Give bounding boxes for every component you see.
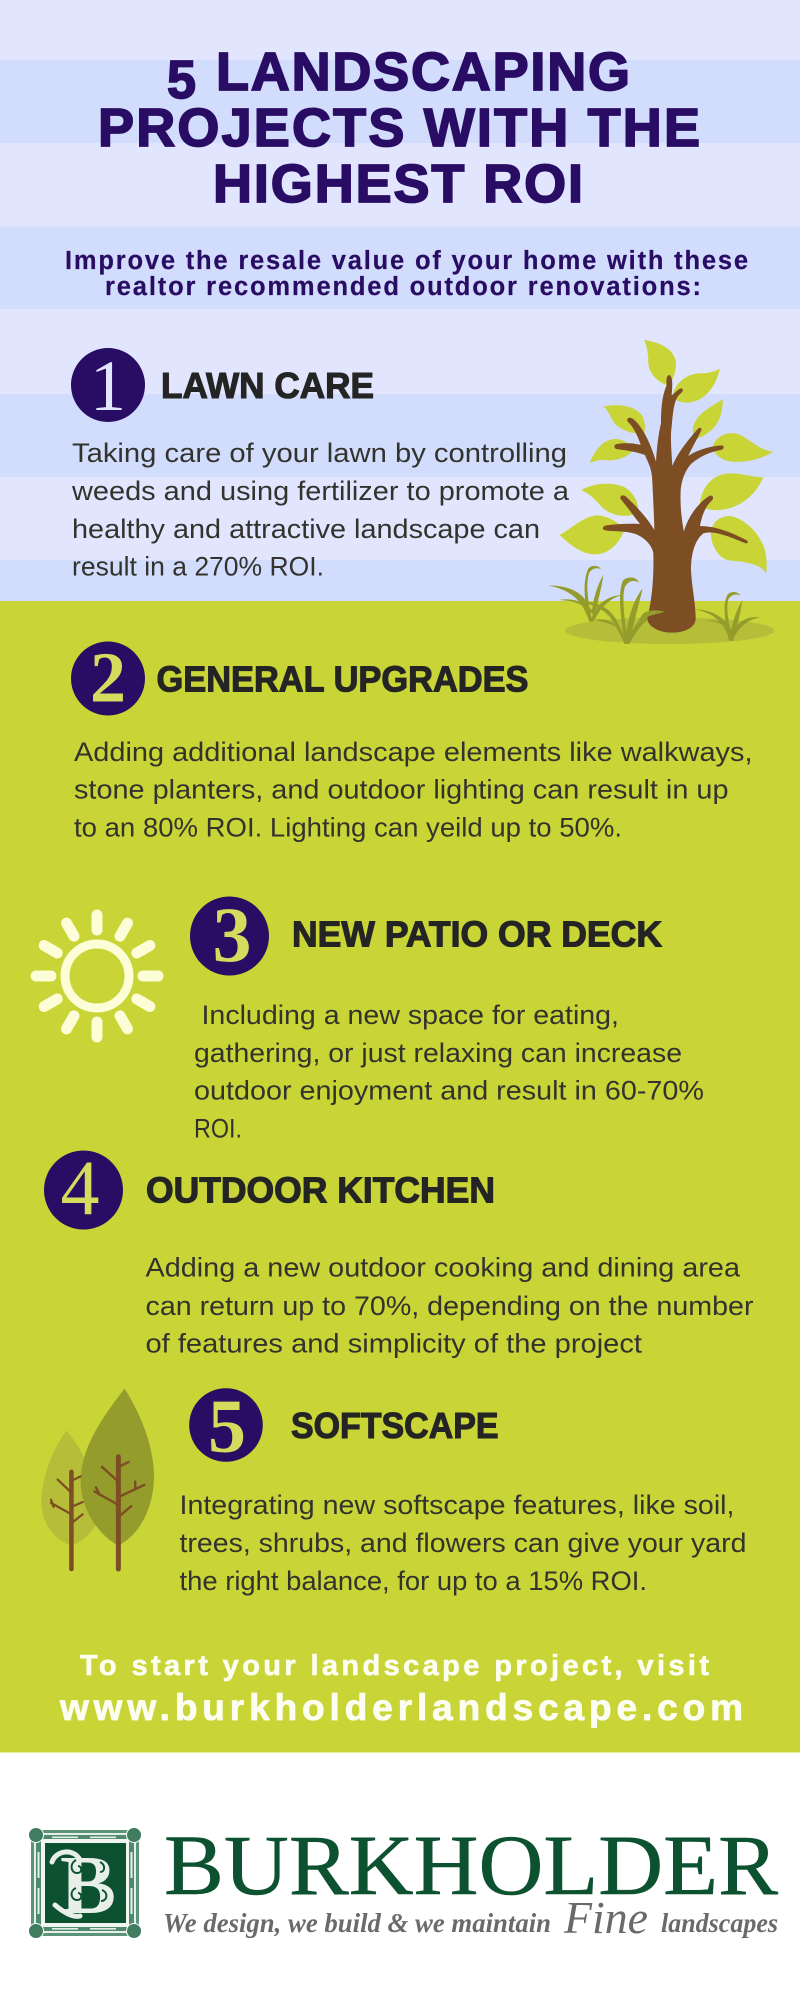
text block: general upgrades: Adding additional landscape elements like walkways, — [74, 737, 752, 767]
small tree crown — [41, 1431, 99, 1546]
text block: general upgrades: to an 80% ROI. Lighting can yeild up to 50%. — [74, 812, 622, 842]
heading: new patio or deck: NEW PATIO OR DECK — [292, 914, 662, 954]
heading: softscape: SOFTSCAPE — [291, 1405, 498, 1446]
number badge 2: 2 — [90, 638, 126, 718]
text block: outdoor kitchen: of features and simplicity of the project — [146, 1328, 643, 1358]
title: LANDSCAPING — [216, 42, 630, 102]
text block: outdoor kitchen: Adding a new outdoor cooking and dining area — [146, 1252, 741, 1282]
number badge 4 — [44, 1144, 123, 1232]
title: HIGHEST ROI — [213, 154, 583, 214]
number badge 5 — [189, 1385, 263, 1469]
ground shadow — [565, 617, 774, 644]
heading: outdoor kitchen: OUTDOOR KITCHEN — [146, 1170, 495, 1210]
text block: lawn care: Taking care of your lawn by controlling — [72, 438, 567, 468]
large tree crown — [81, 1389, 154, 1546]
tufts of grass front — [638, 610, 665, 622]
text block: softscape: Integrating new softscape features, like soil, — [180, 1490, 734, 1520]
callout: website call to action: To start your landscape project, visit — [80, 1650, 709, 1682]
callout: website call to action: www.burkholderlandscape.com — [59, 1687, 743, 1728]
text block: lawn care: result in a 270% ROI. — [72, 552, 324, 582]
text block: softscape: trees, shrubs, and flowers can give your yard — [180, 1528, 746, 1558]
logo emblem: B — [60, 1839, 116, 1932]
number badge 1: 1 — [90, 346, 126, 426]
subtitle — [65, 247, 748, 301]
logo wordmark: BURKHOLDER — [164, 1817, 779, 1913]
title — [98, 42, 700, 214]
text block: softscape — [180, 1490, 746, 1596]
panel: step 5 softscape — [180, 1385, 746, 1596]
panel: striped sky background — [0, 0, 800, 601]
number badge 2 — [71, 638, 145, 718]
text block: lawn care — [71, 438, 570, 582]
text block: new patio or deck: outdoor enjoyment and result in 60-70% — [194, 1076, 704, 1106]
text block: new patio or deck: Including a new space for eating, — [202, 1000, 619, 1030]
subtitle: Improve the resale value of your home with these — [65, 247, 748, 275]
number badge 3 — [190, 891, 269, 978]
text block: new patio or deck — [194, 1000, 704, 1144]
text block: lawn care: healthy and attractive landscape can — [72, 514, 540, 544]
panel: step 4 outdoor kitchen — [44, 1144, 754, 1358]
tufts of grass behind trunk — [548, 566, 665, 644]
title: PROJECTS WITH THE — [98, 98, 700, 158]
tuft of grass right — [695, 592, 760, 641]
title: 5 — [167, 50, 196, 110]
text block: new patio or deck: ROI. — [194, 1114, 242, 1144]
trunk and branches — [603, 375, 748, 633]
panel: white footer background — [0, 1752, 800, 2000]
icon: tree with leaves and grass — [548, 340, 774, 644]
number badge 5: 5 — [208, 1385, 246, 1469]
logo tagline: landscapes — [661, 1908, 778, 1938]
logo: Burkholder — [28, 1817, 779, 1943]
icon: two trees — [41, 1389, 154, 1569]
heading: general upgrades: GENERAL UPGRADES — [156, 658, 528, 700]
text block: general upgrades: stone planters, and outdoor lighting can result in up — [74, 774, 728, 804]
number badge 3: 3 — [212, 891, 252, 978]
icon: sun — [36, 915, 158, 1037]
logo emblem — [28, 1828, 142, 1938]
logo tagline: We design, we build & we maintain — [163, 1908, 551, 1938]
text block: outdoor kitchen: can return up to 70%, depending on the number — [146, 1291, 754, 1321]
heading: lawn care: LAWN CARE — [161, 365, 374, 406]
number badge 4: 4 — [60, 1144, 100, 1232]
subtitle: realtor recommended outdoor renovations: — [105, 273, 701, 301]
logo tagline — [163, 1892, 778, 1943]
logo tagline: Fine — [563, 1892, 648, 1943]
callout: website call to action — [59, 1650, 743, 1728]
text block: softscape: the right balance, for up to a 15% ROI. — [180, 1566, 647, 1596]
text block: outdoor kitchen — [146, 1252, 754, 1358]
panel: green lawn background — [0, 601, 800, 1752]
text block: general upgrades — [74, 737, 752, 842]
tree trunks and branches — [51, 1457, 144, 1569]
leaves — [560, 340, 773, 574]
number badge 1 — [71, 346, 145, 426]
text block: lawn care: weeds and using fertilizer to promote a — [71, 476, 570, 506]
panel: step 2 general upgrades — [71, 638, 752, 842]
panel: step 1 lawn care — [71, 346, 570, 582]
panel: step 3 new patio or deck — [190, 891, 704, 1144]
text block: new patio or deck: gathering, or just relaxing can increase — [194, 1038, 682, 1068]
